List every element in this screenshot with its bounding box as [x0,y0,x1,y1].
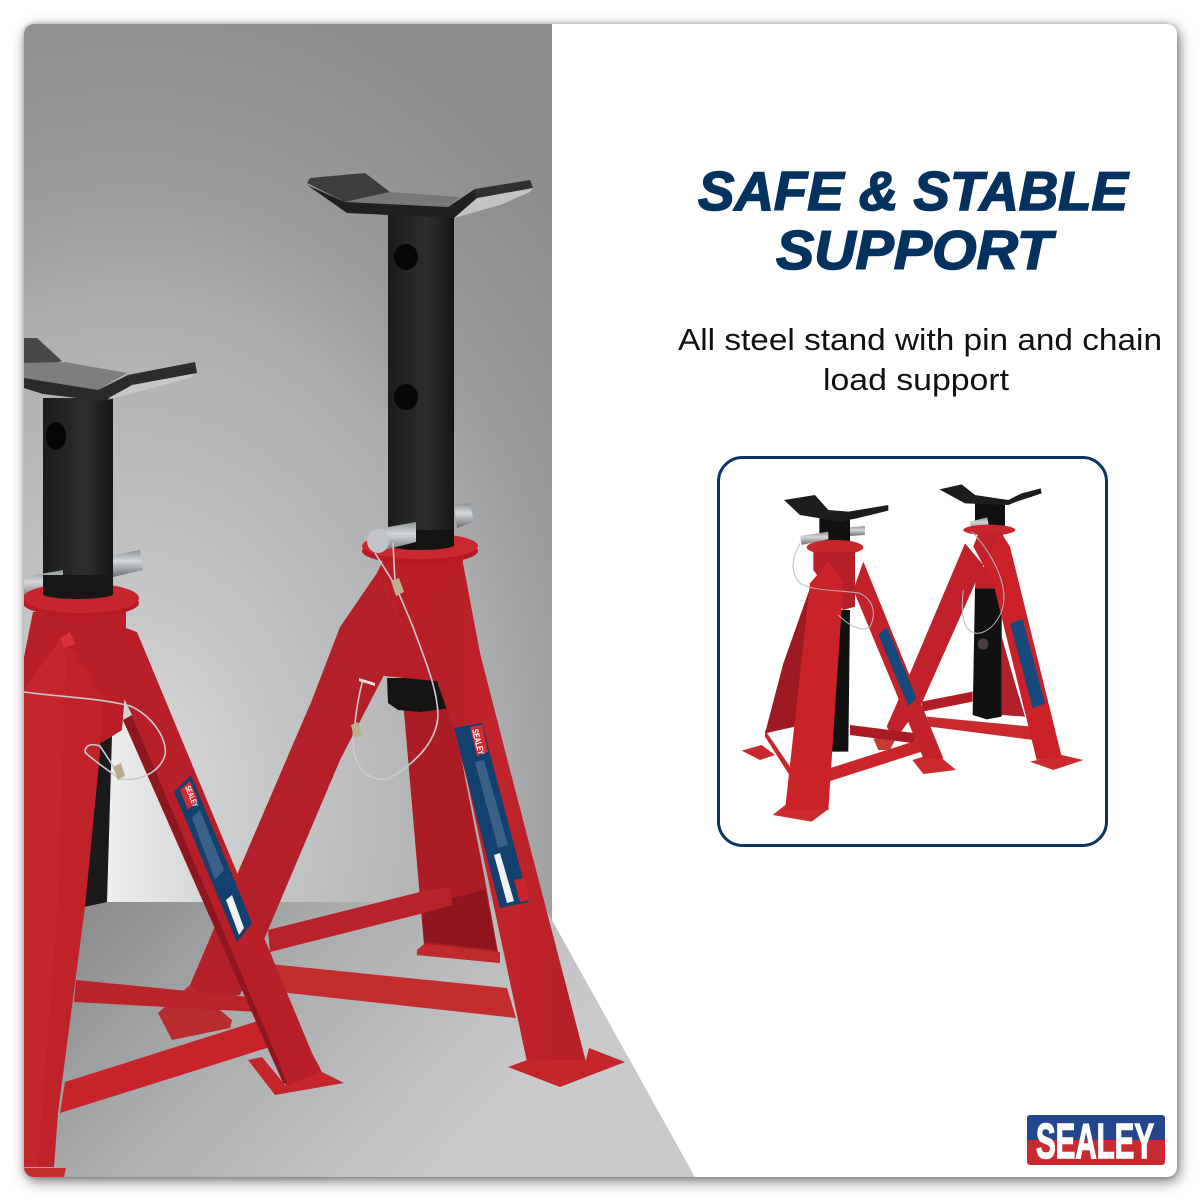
safety cable [24,692,165,780]
heading line two: SUPPORT [776,219,1057,281]
upper tube [388,215,454,548]
panel: product photo [23,24,695,1177]
front stand rear foot [742,745,775,760]
bar to right leg [60,1020,270,1113]
front leg [38,722,101,1167]
light glow behind [105,725,208,902]
lower inner tube [84,735,112,907]
logo red band [1027,1140,1165,1165]
front stand pins [800,526,865,545]
photo floor [24,902,695,1177]
front stand lower tube [831,610,850,752]
upper tube [43,398,113,575]
retaining pin [367,503,474,553]
cable clip [351,578,404,738]
left leg [190,573,407,1000]
cross bar to back [268,887,452,952]
back stand rear leg [1002,637,1025,717]
back foot of left leg [158,985,232,1040]
front stand collar [807,540,863,610]
front stand rear leg [765,583,812,733]
jack stand: left, cropped [23,338,344,1177]
back stand [873,484,1083,770]
front foot [24,1168,66,1177]
collar [362,530,478,564]
neck highlight [60,632,75,648]
front stand right foot [912,757,956,774]
logo blue band [1027,1115,1165,1141]
back stand collar [963,525,1015,565]
front leg [418,563,586,1062]
back stand hole [978,638,988,650]
tube hole [46,422,66,450]
warning label: SEALEY [183,784,200,809]
back foot lip [417,944,500,963]
front stand front foot [773,803,829,822]
cross bar to front [270,964,516,1018]
thumbnail frame [718,458,1106,846]
cable clip [113,763,125,780]
back stand bars [922,692,1033,740]
back stand front leg [983,533,1062,760]
pin [24,550,143,600]
safety cable [353,543,438,779]
front stand cable [793,543,873,629]
bar behind front leg [74,980,259,1012]
back stand pad [939,484,1042,505]
back stand left leg [887,543,983,740]
right leg dark face [123,715,288,1085]
back stand sleeve [975,567,995,588]
front stand front leg [785,562,843,810]
front stand label [878,627,917,706]
back stand cable [962,532,1004,633]
back stand pin [970,517,989,530]
collar [24,575,139,613]
front foot [508,1048,625,1087]
front stand tube [819,518,850,547]
pad [307,173,533,218]
neck [377,560,463,624]
tube holes [394,244,418,410]
inner lower tube [387,678,450,712]
pad [24,338,197,401]
front stand bars [828,725,922,782]
front stand pad [784,495,888,522]
body text [678,322,1162,397]
right leg [120,627,322,1085]
back stand tube [975,502,1005,530]
right foot [248,1057,344,1095]
front stand right leg [853,562,943,758]
back stand foot [1030,755,1083,770]
jack stand: right, large [158,173,625,1087]
back leg [403,700,500,963]
warning label: SEALEY [470,728,486,756]
photo wall backdrop [24,24,552,924]
back stand lower tube [973,588,1002,719]
back stand label [1010,619,1045,708]
body line one: All steel stand with pin and chain [678,322,1162,357]
front stand [742,495,956,822]
front stand small bar [765,730,790,775]
body line two: load support [823,362,1009,397]
logo: Sealey [1027,1115,1165,1169]
red sleeve [384,623,437,682]
neck [24,612,126,742]
warning label [174,775,252,942]
back stand back foot [873,737,897,750]
heading [698,160,1130,281]
heading line one: SAFE & STABLE [698,160,1130,222]
warning label [454,723,529,908]
thumbnail: pair of jack stands [742,484,1084,822]
